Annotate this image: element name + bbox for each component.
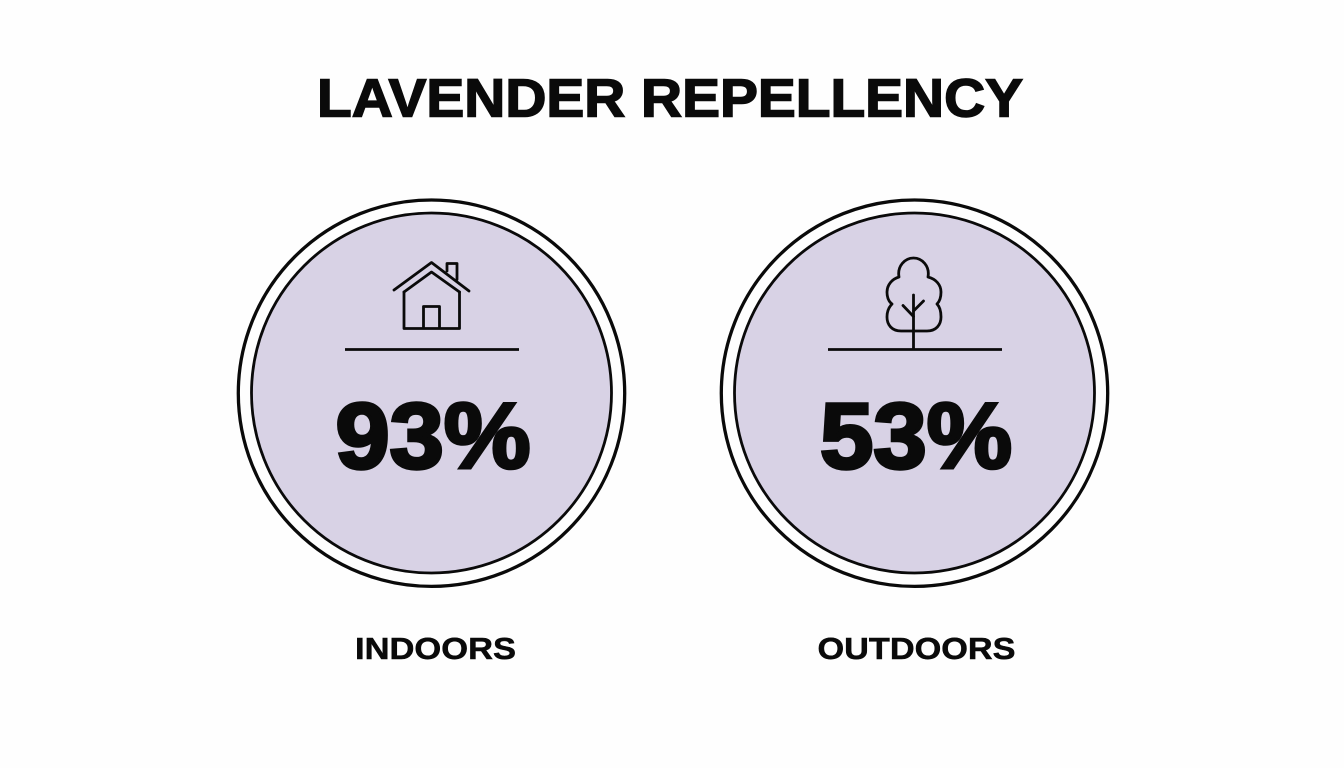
lavender disc [252,213,612,573]
outer ring [238,200,625,586]
label: indoors: INDOORS [355,631,516,666]
divider line [828,348,1002,351]
icon: tree [887,258,941,349]
divider line [345,348,519,351]
value: 93%: 93% [336,384,530,488]
icon: house [394,262,469,328]
panel: indoors [238,200,625,586]
title: LAVENDER REPELLENCY [317,68,1023,128]
lavender disc [734,213,1094,573]
panel: outdoors [721,200,1108,586]
outer ring [721,200,1108,586]
label: outdoors: OUTDOORS [818,631,1016,666]
value: 53%: 53% [820,384,1012,488]
